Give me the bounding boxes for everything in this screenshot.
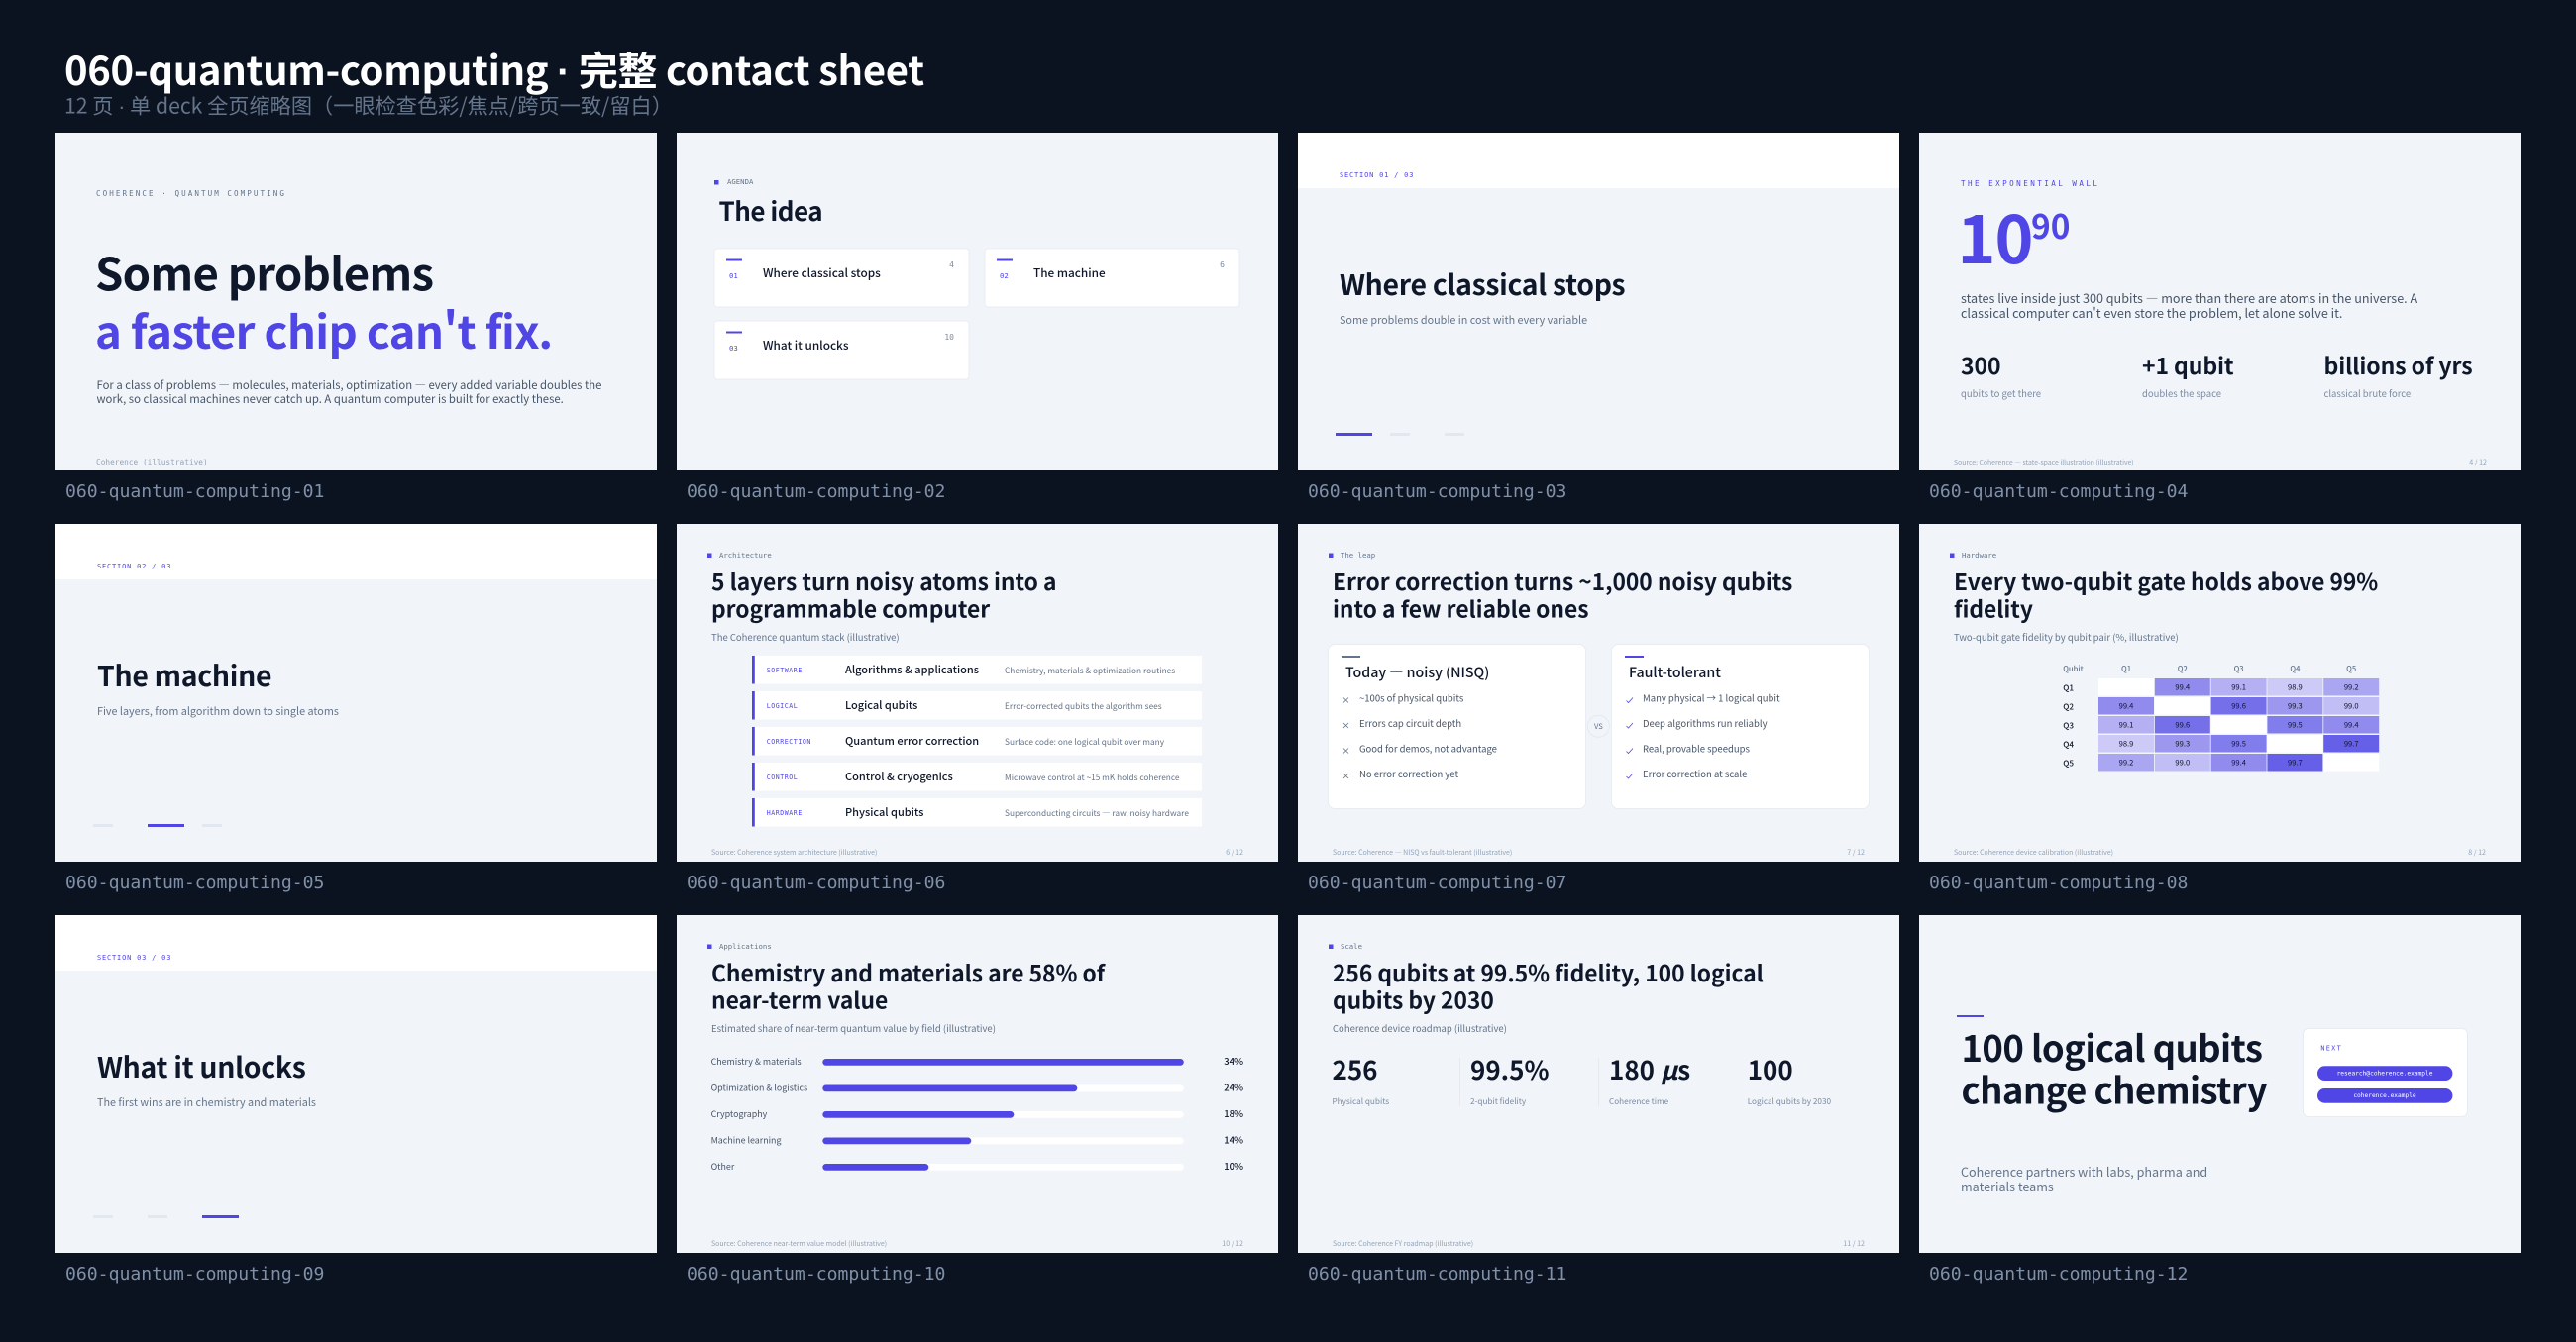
- progress indicator: [93, 824, 222, 827]
- footer: 8 / 12: [2468, 848, 2486, 858]
- caption 07: 060-quantum-computing-07: [1308, 873, 1566, 893]
- headline: qubits by 2030: [1333, 982, 1494, 1016]
- row Q5: 99.7: [2288, 757, 2303, 769]
- headline: into a few reliable ones: [1333, 592, 1588, 624]
- subtitle: The Coherence quantum stack (illustrative): [711, 630, 900, 644]
- row Q5: 99.0: [2175, 757, 2190, 769]
- closing headline: 100 logical qubits: [1962, 1020, 2262, 1073]
- subtitle: 12 页 · 单 deck 全页缩略图（一眼检查色彩/焦点/跨页一致/留白）: [64, 89, 673, 121]
- panel: slide 07 the leap: [1298, 524, 1899, 862]
- closing paragraph: [1961, 1162, 2207, 1195]
- bar: machine learning: [711, 1133, 1243, 1147]
- layer: hardware: Superconducting circuits — raw, noisy hardware: [1005, 807, 1189, 819]
- card: fault tolerant: Deep algorithms run reliably: [1643, 716, 1768, 730]
- eyebrow: Architecture: [719, 551, 772, 560]
- heatmap header: Qubit: [2063, 664, 2084, 674]
- row Q3: 99.4: [2344, 719, 2359, 731]
- paragraph: states live inside just 300 qubits — more than there are atoms in the universe. A: [1961, 288, 2417, 307]
- footer: [711, 848, 1243, 858]
- footer: Source: Coherence system architecture (illustrative): [711, 848, 877, 858]
- progress indicator: [1336, 433, 1464, 436]
- bar: optimization: 24%: [1224, 1080, 1243, 1093]
- bar: other: Other: [711, 1160, 735, 1173]
- bar: cryptography: [711, 1106, 1243, 1120]
- bar chart: [711, 1054, 1243, 1173]
- row Q1: [2063, 678, 2379, 695]
- cover paragraph: For a class of problems — molecules, materials, optimization — every added variable doubles the: [97, 377, 601, 393]
- stat 2: [2142, 348, 2234, 400]
- panel: slide 12 closing: [1919, 915, 2521, 1253]
- panel: slide 01 cover: [55, 133, 657, 470]
- agenda card 2: 02: [1000, 271, 1009, 280]
- headline: [711, 956, 1107, 1016]
- row Q4: Q4: [2063, 739, 2074, 751]
- caption 10: 060-quantum-computing-10: [687, 1264, 945, 1285]
- eyebrow: Hardware: [1962, 551, 1996, 560]
- caption 11: 060-quantum-computing-11: [1308, 1264, 1566, 1285]
- footer: Source: Coherence — state-space illustration (illustrative): [1954, 457, 2134, 466]
- cover headline: a faster chip can't fix.: [95, 297, 553, 362]
- footer: [1954, 848, 2486, 858]
- cover paragraph: work, so classical machines never catch up. A quantum computer is built for exactly these.: [97, 391, 564, 407]
- next card: NEXT: [2320, 1044, 2342, 1052]
- subtitle: Estimated share of near-term quantum value by field (illustrative): [711, 1021, 996, 1035]
- heatmap header: Q1: [2121, 664, 2131, 674]
- layer: control: Microwave control at ~15 mK holds coherence: [1005, 772, 1180, 783]
- headline: Error correction turns ~1,000 noisy qubits: [1333, 565, 1792, 597]
- layer: software: [752, 656, 1202, 683]
- bar: other: [711, 1159, 1243, 1173]
- layer: hardware: Physical qubits: [845, 804, 923, 820]
- layer: software: Algorithms & applications: [845, 662, 979, 677]
- section label: SECTION 02 / 03: [97, 563, 171, 570]
- closing paragraph: Coherence partners with labs, pharma and: [1961, 1162, 2207, 1181]
- caption 08: 060-quantum-computing-08: [1929, 873, 2188, 893]
- layer: correction: CORRECTION: [767, 738, 811, 746]
- card: fault tolerant: Error correction at scale: [1643, 767, 1747, 780]
- footer: [1333, 848, 1865, 858]
- panel: slide 11 scale: [1298, 915, 1899, 1253]
- card: today noisy: ~100s of physical qubits: [1359, 691, 1464, 705]
- section title: What it unlocks: [97, 1046, 306, 1086]
- row Q2: 99.4: [2119, 701, 2133, 711]
- stat 1: 300: [1961, 348, 2000, 381]
- pill: website: coherence.example: [2353, 1092, 2416, 1099]
- layer: hardware: [752, 798, 1202, 826]
- stat: physical qubits: 256: [1332, 1051, 1378, 1087]
- layer: logical: [752, 691, 1202, 719]
- row Q1: Q1: [2063, 681, 2074, 693]
- row Q4: 99.7: [2344, 739, 2359, 749]
- layer: software: SOFTWARE: [767, 667, 803, 674]
- stat: coherence time: [1609, 1051, 1690, 1107]
- agenda card 2: 6: [1220, 260, 1225, 269]
- agenda eyebrow: [714, 177, 754, 186]
- headline: fidelity: [1954, 592, 2033, 624]
- closing headline: [1962, 1020, 2268, 1115]
- stat: fidelity: [1470, 1051, 1550, 1107]
- agenda card 3: What it unlocks: [763, 337, 849, 354]
- big number: 90: [2031, 200, 2071, 249]
- bar: chemistry: [711, 1054, 1243, 1068]
- closing headline: change chemistry: [1962, 1062, 2268, 1115]
- card: today noisy: Errors cap circuit depth: [1359, 716, 1461, 730]
- panel: slide 09 section: [55, 915, 657, 1253]
- headline: programmable computer: [711, 592, 990, 624]
- agenda card 3: [714, 321, 969, 379]
- cover headline: Some problems: [95, 240, 434, 305]
- panel: slide 03 section: [1298, 133, 1899, 470]
- eyebrow: [1329, 942, 1362, 951]
- heatmap header: Q5: [2346, 664, 2356, 674]
- headline: near-term value: [711, 982, 888, 1016]
- cover paragraph: [97, 377, 601, 407]
- bar: optimization: [711, 1080, 1243, 1093]
- pill: email: research@coherence.example: [2337, 1070, 2433, 1078]
- section title: Where classical stops: [1340, 263, 1626, 304]
- row Q3: 99.6: [2175, 719, 2190, 731]
- section subtitle: Five layers, from algorithm down to single atoms: [97, 703, 339, 719]
- agenda card 1: Where classical stops: [763, 264, 881, 281]
- headline: [711, 565, 1056, 624]
- bar: chemistry: Chemistry & materials: [711, 1055, 802, 1068]
- card: fault tolerant: [1611, 644, 1869, 808]
- card: today noisy: Good for demos, not advantage: [1359, 741, 1497, 755]
- eyebrow: Applications: [719, 942, 772, 951]
- layer: logical: Logical qubits: [845, 697, 917, 713]
- panel: slide 05 section: [55, 524, 657, 862]
- footer: 11 / 12: [1843, 1239, 1865, 1249]
- row Q3: Q3: [2063, 719, 2074, 731]
- layer: software: Chemistry, materials & optimization routines: [1005, 665, 1175, 676]
- stat: fidelity: 99.5%: [1470, 1051, 1550, 1087]
- row Q4: 99.3: [2175, 739, 2190, 749]
- footer: 4 / 12: [2469, 458, 2487, 467]
- stat: fidelity: 2-qubit fidelity: [1470, 1095, 1527, 1107]
- footer: 10 / 12: [1222, 1239, 1243, 1249]
- section label: SECTION 01 / 03: [1340, 171, 1414, 179]
- subtitle: Coherence device roadmap (illustrative): [1333, 1021, 1507, 1035]
- heatmap: [2063, 664, 2379, 771]
- stat: physical qubits: Physical qubits: [1332, 1095, 1389, 1107]
- headline: [1954, 565, 2378, 624]
- panel: slide 04 exponential wall: [1919, 133, 2521, 470]
- row Q4: 98.9: [2119, 739, 2133, 749]
- row Q5: Q5: [2063, 757, 2074, 769]
- card: today noisy: Today — noisy (NISQ): [1345, 663, 1489, 682]
- stat: coherence time: 180 μs: [1609, 1051, 1690, 1087]
- caption 09: 060-quantum-computing-09: [65, 1264, 324, 1285]
- caption 01: 060-quantum-computing-01: [65, 481, 324, 502]
- cover eyebrow: COHERENCE · QUANTUM COMPUTING: [96, 189, 286, 198]
- section label: SECTION 03 / 03: [97, 954, 171, 962]
- caption 03: 060-quantum-computing-03: [1308, 481, 1566, 502]
- footer: 6 / 12: [1226, 848, 1243, 858]
- cover headline: [95, 240, 553, 362]
- row Q4: [2063, 735, 2379, 753]
- footer: Source: Coherence device calibration (illustrative): [1954, 848, 2113, 858]
- accent rule: [1957, 1015, 1984, 1017]
- footer: 7 / 12: [1847, 848, 1865, 858]
- agenda card 3: 10: [944, 333, 954, 342]
- layer: control: Control & cryogenics: [845, 769, 953, 784]
- stat: logical qubits: Logical qubits by 2030: [1748, 1095, 1832, 1107]
- agenda card 1: 4: [949, 260, 954, 269]
- caption 12: 060-quantum-computing-12: [1929, 1264, 2188, 1285]
- pill: email: [2317, 1066, 2452, 1081]
- panel: slide 06 architecture: [677, 524, 1278, 862]
- row Q5: 99.2: [2119, 757, 2133, 769]
- bar: cryptography: Cryptography: [711, 1107, 768, 1120]
- heatmap header: Q4: [2290, 664, 2301, 674]
- footer: [711, 1239, 1243, 1249]
- eyebrow: Scale: [1341, 942, 1362, 951]
- card: today noisy: No error correction yet: [1359, 767, 1458, 780]
- footer: Source: Coherence near-term value model (illustrative): [711, 1239, 887, 1249]
- agenda card 3: 03: [729, 344, 738, 353]
- row Q1: 98.9: [2288, 681, 2303, 693]
- section subtitle: The first wins are in chemistry and materials: [97, 1094, 316, 1110]
- row Q1: 99.1: [2231, 681, 2246, 693]
- headline: Chemistry and materials are 58% of: [711, 956, 1107, 988]
- row Q3: 99.5: [2288, 719, 2303, 731]
- layer: logical: LOGICAL: [767, 702, 798, 710]
- caption 04: 060-quantum-computing-04: [1929, 481, 2189, 502]
- layer: logical: Error-corrected qubits the algorithm sees: [1005, 700, 1162, 712]
- stat 3: billions of yrs: [2324, 348, 2473, 381]
- big number: 10: [1958, 188, 2032, 283]
- footer: [1333, 1239, 1865, 1249]
- closing paragraph: materials teams: [1961, 1177, 2054, 1195]
- heatmap header: [2063, 664, 2356, 674]
- row Q3: 99.1: [2119, 719, 2133, 731]
- footer: Source: Coherence FY roadmap (illustrative): [1333, 1239, 1473, 1249]
- row Q2: Q2: [2063, 701, 2074, 713]
- card: fault tolerant: Real, provable speedups: [1643, 741, 1751, 755]
- row Q5: 99.4: [2231, 757, 2246, 769]
- section subtitle: Some problems double in cost with every variable: [1340, 312, 1587, 328]
- eyebrow: The leap: [1341, 551, 1375, 560]
- card: today noisy: [1328, 644, 1585, 808]
- paragraph: classical computer can't even store the problem, let alone solve it.: [1961, 303, 2342, 322]
- stat: physical qubits: [1332, 1051, 1389, 1107]
- footer: [1954, 457, 2487, 467]
- headline: [1333, 565, 1792, 624]
- cover footer: Coherence (illustrative): [96, 458, 208, 466]
- stat 3: classical brute force: [2324, 386, 2411, 400]
- heatmap header: Q2: [2178, 664, 2188, 674]
- subtitle: Two-qubit gate fidelity by qubit pair (%, illustrative): [1954, 630, 2179, 644]
- caption 05: 060-quantum-computing-05: [65, 873, 324, 893]
- row Q2: 99.6: [2231, 701, 2246, 711]
- headline: [1333, 956, 1764, 1016]
- row Q5: [2063, 754, 2379, 771]
- row Q3: [2063, 716, 2379, 733]
- agenda card 1: 01: [729, 271, 738, 280]
- headline: Every two-qubit gate holds above 99%: [1954, 565, 2378, 597]
- section title: The machine: [97, 655, 271, 695]
- stat 3: [2324, 348, 2473, 400]
- layer: correction: [752, 727, 1202, 755]
- progress indicator: [93, 1215, 239, 1218]
- bar: machine learning: Machine learning: [711, 1133, 781, 1147]
- bar: cryptography: 18%: [1224, 1106, 1243, 1120]
- headline: 256 qubits at 99.5% fidelity, 100 logical: [1333, 956, 1764, 988]
- bar: machine learning: 14%: [1224, 1133, 1243, 1147]
- row Q2: 99.0: [2344, 701, 2359, 711]
- section band: [55, 915, 657, 971]
- stat: logical qubits: 100: [1748, 1051, 1793, 1087]
- stat 1: qubits to get there: [1961, 386, 2041, 400]
- panel: slide 10 applications: [677, 915, 1278, 1253]
- agenda card 2: [985, 249, 1239, 307]
- agenda heading: The idea: [719, 192, 822, 229]
- card: fault tolerant: Many physical → 1 logical qubit: [1643, 691, 1780, 705]
- row Q1: 99.2: [2344, 681, 2359, 693]
- stat: logical qubits: [1748, 1051, 1832, 1107]
- bar: other: 10%: [1224, 1159, 1243, 1173]
- big number: [1958, 188, 2071, 283]
- layer: control: [752, 763, 1202, 790]
- title: 060-quantum-computing · 完整 contact sheet: [64, 40, 924, 97]
- stat 2: doubles the space: [2142, 386, 2221, 400]
- layer: hardware: HARDWARE: [767, 809, 803, 817]
- row Q2: 99.3: [2288, 701, 2303, 711]
- heatmap header: Q3: [2234, 664, 2244, 674]
- layer: control: CONTROL: [767, 774, 798, 781]
- bar: optimization: Optimization & logistics: [711, 1082, 807, 1093]
- pill: website: [2317, 1088, 2452, 1103]
- caption 06: 060-quantum-computing-06: [687, 873, 945, 893]
- bar: chemistry: 34%: [1224, 1054, 1243, 1068]
- layer: correction: Surface code: one logical qubit over many: [1005, 736, 1165, 748]
- agenda eyebrow: AGENDA: [727, 177, 754, 186]
- vs badge: [1587, 715, 1609, 737]
- row Q1: 99.4: [2175, 681, 2190, 693]
- section band: [55, 524, 657, 579]
- panel: slide 02 agenda: [677, 133, 1278, 470]
- stat: coherence time: Coherence time: [1609, 1095, 1669, 1107]
- footer: Source: Coherence — NISQ vs fault-tolerant (illustrative): [1333, 848, 1512, 858]
- layer: correction: Quantum error correction: [845, 733, 979, 749]
- panel: slide 08 hardware: [1919, 524, 2521, 862]
- section band: [1298, 133, 1899, 188]
- vs badge: VS: [1594, 721, 1603, 732]
- stat 2: +1 qubit: [2142, 348, 2234, 381]
- agenda card 2: The machine: [1033, 264, 1106, 281]
- eyebrow: THE EXPONENTIAL WALL: [1961, 179, 2099, 188]
- row Q2: [2063, 697, 2379, 715]
- card: fault tolerant: Fault-tolerant: [1629, 663, 1721, 682]
- stat 1: [1961, 348, 2041, 400]
- agenda card 1: [714, 249, 969, 307]
- paragraph: [1961, 288, 2417, 322]
- next card: [2304, 1029, 2467, 1116]
- caption 02: 060-quantum-computing-02: [687, 481, 945, 502]
- row Q4: 99.5: [2231, 739, 2246, 749]
- headline: 5 layers turn noisy atoms into a: [711, 565, 1056, 597]
